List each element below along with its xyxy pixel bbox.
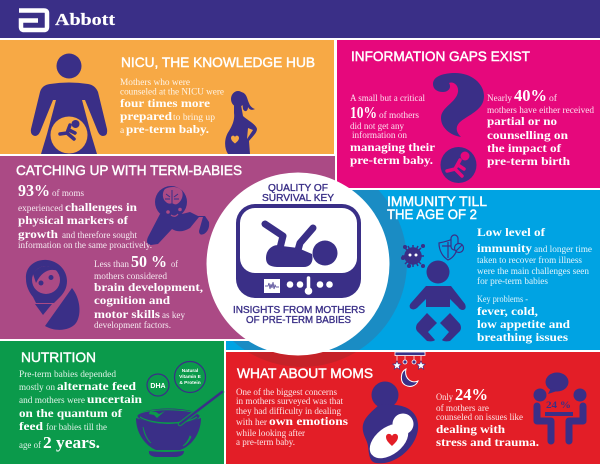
icon: vitamin E and protein badge: Natural [182,368,198,374]
text block: feed [19,419,43,433]
icon: bowl with spoon [136,392,222,457]
icon: swaddled baby [26,260,79,330]
heading: CATCHING UP WITH TERM-BABIES [16,162,242,178]
text block: and mothers were [19,396,85,406]
text block: Only [436,393,453,403]
text block: counseled at the NICU were [120,88,224,98]
text block: alternate feed [57,379,136,393]
icon: baby mobile [393,352,425,386]
brand name: Abbott [55,10,115,29]
circle subtitle: INSIGHTS FROM MOTHERS [233,304,365,316]
text block: dealing with [436,422,505,436]
right text block [487,86,594,168]
text block [477,225,592,344]
text block: for pre-term babies [477,276,548,287]
heading: NICU, THE KNOWLEDGE HUB [121,54,315,70]
icon: DHA badge: DHA [150,383,166,390]
text block: 50% [94,252,203,331]
text block: a [120,126,125,136]
left text block: of mothers [379,110,419,121]
text block: while looking after [236,428,306,439]
icon: vitamin E and protein badge: Vitamin E [179,374,202,380]
text block: prepared [120,109,172,123]
text block [236,387,348,448]
right text block: counselling on [487,128,568,142]
right text block: mothers have either received [487,106,594,116]
left text block: did not get any [350,122,404,132]
text block: 93%: physical markers of [18,213,129,227]
heading: IMMUNITY TILL [387,193,487,209]
icon: shield and pill [439,235,464,260]
icon: vitamin E and protein badge: & Protein [179,380,201,386]
text block: to bring up [173,113,215,123]
left text block: information on [352,130,407,141]
text block: counseled on issues like [436,413,523,423]
text block: 93% [18,181,152,251]
right text block: partial or no [487,114,557,128]
text block: 93%: information on the same proactively. [18,240,152,251]
text block: 93%: 93% [18,181,50,200]
center circle: quality of survival key [206,172,390,356]
text block: 50%: 50 % [131,252,167,271]
right text block: 40% [514,86,547,105]
text block: 2 years. [43,433,100,452]
text block: age of [19,440,42,451]
icon: pregnant woman silhouette [225,91,257,154]
header bar [0,0,600,38]
text block: 24% [455,385,488,404]
text block [19,370,142,452]
text block: a pre-term baby. [236,438,295,448]
text block: and longer time [534,245,592,255]
left text block: managing their [350,140,436,154]
circle title: QUALITY OF [268,182,328,194]
right text block: Nearly [487,94,512,104]
text block: 50%: mothers considered [94,272,167,282]
text block: pre-term baby. [126,122,209,136]
panel: what about moms [226,352,600,464]
panel: NICU, the knowledge hub [0,40,334,154]
icon: crawling baby [147,186,209,245]
text block: immunity [477,241,532,255]
text block: were the main challenges seen [477,267,589,277]
panel: catching up with term-babies [0,156,335,339]
text block: with her [236,418,268,428]
icon: counselling session [534,372,586,441]
icon: virus [402,245,424,267]
icon: Abbott logo [19,10,47,30]
text block: 93%: experienced [18,204,63,214]
panel: nutrition [0,341,224,464]
text block: 93%: of moms [52,188,84,199]
text block: 50%: brain development, [94,280,203,294]
text block: 93%: challenges in [65,200,137,214]
text block: on the quantum of [19,406,123,420]
text block: 50%: cognition and [94,293,170,307]
text block: four times more [120,96,211,110]
text block: 50%: of [171,259,179,270]
panel: immunity till the age of 2 [226,190,600,350]
text block: Low level of [477,225,546,239]
left text block: 10% [350,103,377,122]
text block: of mothers are [436,403,489,414]
text block: fever, cold, [477,304,538,318]
right text block: pre-term birth [487,154,570,168]
right text block: of [549,93,558,104]
text block: uncertain [87,392,142,406]
heading: THE AGE OF 2 [387,206,477,222]
text block: low appetite and [477,317,570,331]
icon: incubator monitor with baby [236,204,361,298]
text block: they had difficulty in dealing [236,406,341,417]
icon: mother holding baby [363,382,418,464]
text block: Mothers who were [120,78,190,88]
circle subtitle [233,304,365,326]
text block: breathing issues [477,330,568,344]
right text block: the impact of [487,141,562,155]
circle title [262,182,334,204]
heading: WHAT ABOUT MOMS [237,365,373,381]
text block: 50%: motor skills [94,307,160,321]
text block: stress and trauma. [436,435,539,449]
icon: vitamin E and protein badge [174,362,206,392]
heading [387,193,487,222]
text block: One of the biggest concerns [236,387,337,398]
icon: mother with baby in womb [31,54,107,154]
text block: mostly on [19,383,55,393]
icon: counselling session: 24 % [546,401,571,411]
text block: in mothers surveyed was that [236,397,343,407]
text block: taken to recover from illness [477,255,582,266]
icon: baby [410,260,466,341]
heading: INFORMATION GAPS EXIST [351,48,530,64]
text block: 50%: as key [162,311,185,321]
left text block: A small but a critical [350,94,425,104]
left text block [350,94,436,167]
icon: question mark with baby [433,73,484,183]
heading: NUTRITION [21,349,96,365]
panel: information gaps exist [337,40,600,188]
text block: 93%: and therefore sought [62,230,137,241]
text block: 50%: development factors. [94,320,171,331]
text block: 50%: Less than [94,260,129,270]
text block: 93%: growth [18,227,58,241]
text block [436,385,539,449]
circle title: SURVIVAL KEY [262,192,334,204]
text block: for babies till the [46,422,107,433]
text block: own emotions [269,414,348,428]
circle subtitle: OF PRE-TERM BABIES [246,314,351,326]
left text block: pre-term baby. [350,153,433,167]
text block [120,78,224,136]
text block: Key problems - [477,295,528,305]
icon: DHA badge [147,374,169,396]
text block: Pre-term babies depended [19,370,116,380]
